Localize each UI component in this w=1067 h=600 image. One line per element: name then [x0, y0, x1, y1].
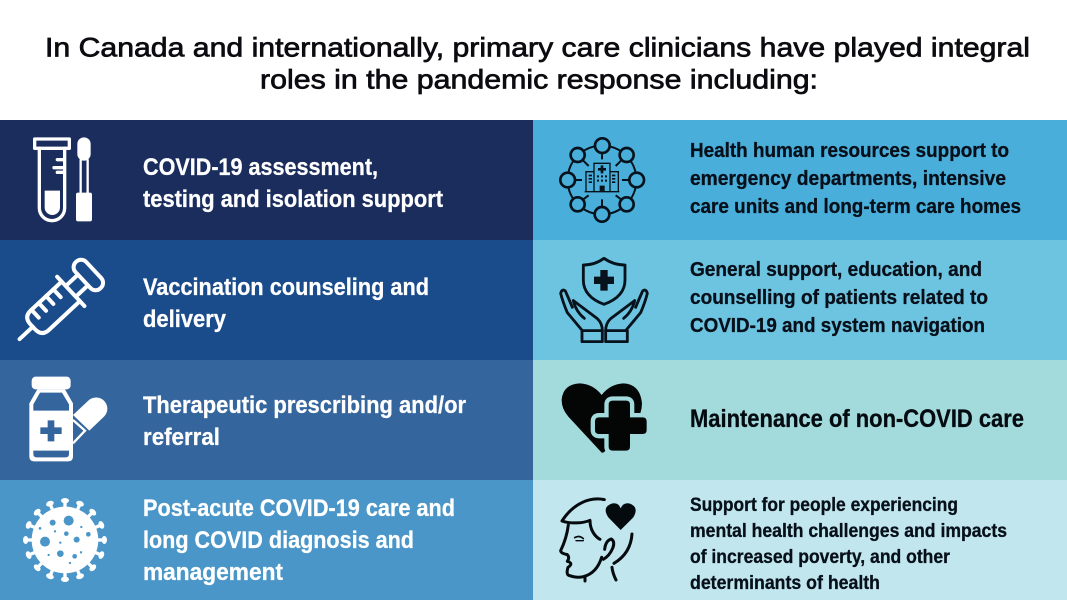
text: health human resources: emergency departments, intensive	[690, 168, 1006, 190]
icon: head with heart	[561, 499, 636, 581]
text: therapeutic prescribing: referral	[143, 424, 220, 451]
panel: post-acute care	[0, 480, 533, 600]
text: mental health support: of increased poverty, and other	[690, 547, 951, 568]
title	[45, 32, 1030, 94]
text: non-COVID care: Maintenance of non-COVID care	[690, 405, 1024, 433]
text: general support: COVID-19 and system navigation	[690, 315, 985, 337]
icon: vial and capsule	[29, 377, 107, 461]
text: vaccination: Vaccination counseling and	[143, 274, 429, 301]
panel: mental health support	[533, 480, 1067, 600]
icon: hospital network	[560, 138, 644, 222]
text: mental health support: Support for people experiencing	[690, 495, 958, 516]
text: therapeutic prescribing	[143, 392, 466, 451]
text: vaccination	[143, 274, 429, 333]
panel: non-COVID care	[533, 360, 1067, 480]
text: vaccination: delivery	[143, 306, 226, 333]
icon: test tube and swab	[35, 137, 92, 221]
panel: COVID-19 assessment	[0, 120, 533, 240]
panel: vaccination	[0, 240, 533, 360]
title: In Canada and internationally, primary care clinicians have played integral	[45, 32, 1030, 62]
text: general support	[690, 259, 988, 337]
text: mental health support: mental health challenges and impacts	[690, 521, 1007, 542]
panel: therapeutic prescribing	[0, 360, 533, 480]
text: COVID-19 assessment: COVID-19 assessment,	[143, 154, 378, 181]
panel: general support	[533, 240, 1067, 360]
icon: shield and hands	[561, 258, 647, 342]
text: general support: General support, education, and	[690, 259, 982, 281]
title: roles in the pandemic response including:	[260, 64, 818, 94]
text: general support: counselling of patients related to	[690, 287, 988, 309]
icon: heart with plus	[562, 383, 647, 453]
text: health human resources: care units and long-term care homes	[690, 196, 1021, 218]
text: health human resources	[690, 140, 1021, 218]
text: post-acute care	[143, 495, 455, 586]
text: post-acute care: Post-acute COVID-19 care and	[143, 495, 455, 522]
text: mental health support	[690, 495, 1007, 594]
text: COVID-19 assessment	[143, 154, 443, 213]
icon: syringe	[6, 255, 107, 354]
text: COVID-19 assessment: testing and isolation support	[143, 186, 443, 213]
icon: virus	[23, 498, 107, 582]
text: therapeutic prescribing: Therapeutic prescribing and/or	[143, 392, 466, 419]
text: post-acute care: long COVID diagnosis and	[143, 527, 414, 554]
panel: health human resources	[533, 120, 1067, 240]
text: post-acute care: management	[143, 559, 283, 586]
text: mental health support: determinants of health	[690, 573, 880, 594]
text: health human resources: Health human resources support to	[690, 140, 1009, 162]
